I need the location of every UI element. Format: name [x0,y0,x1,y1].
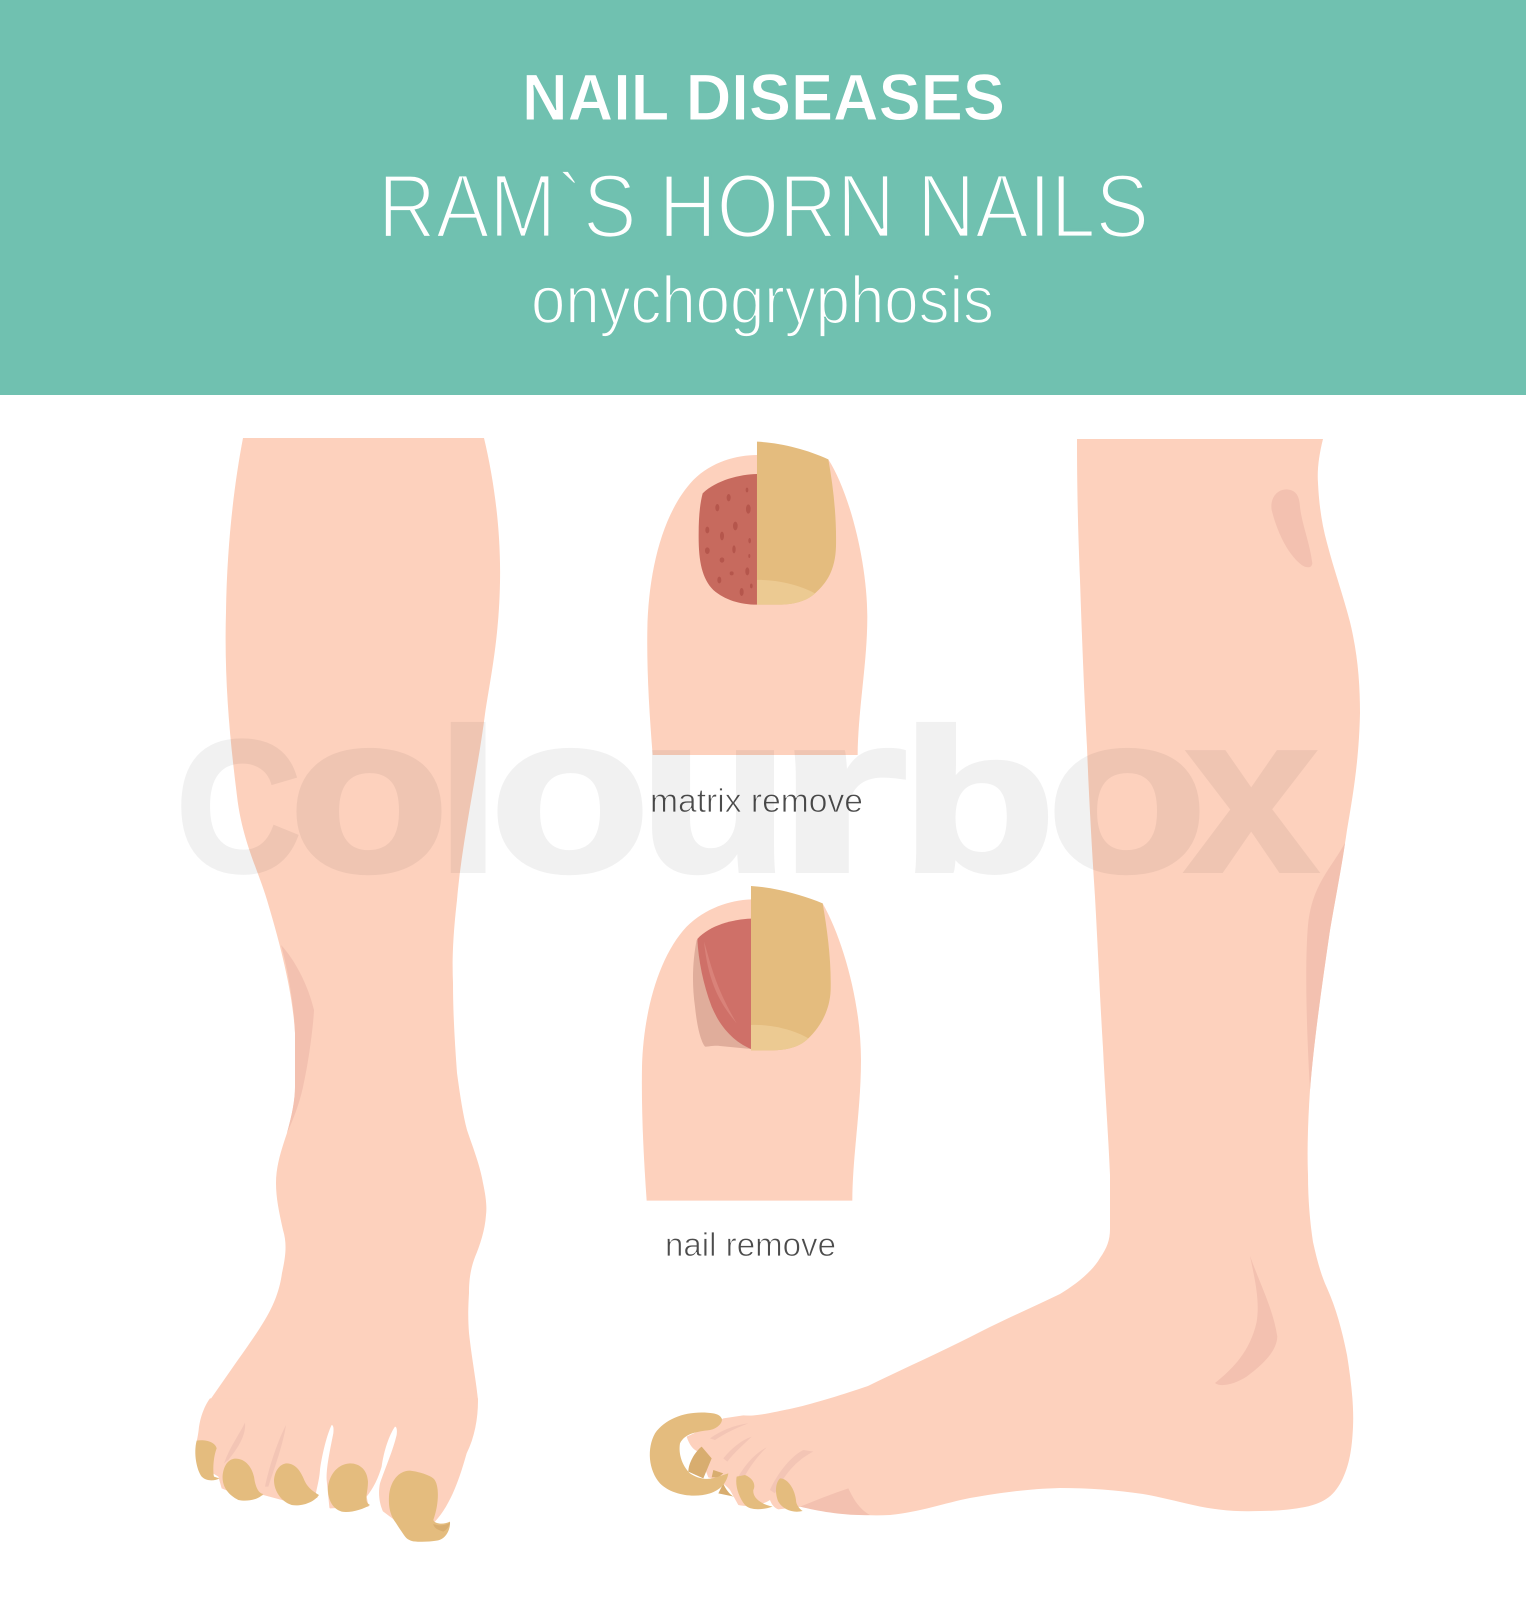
watermark [176,667,1318,919]
calf shadow [1306,843,1345,1090]
nail lunula [751,1025,808,1050]
toe creases [710,1423,813,1493]
nail bed shadow [693,940,751,1049]
curled big toe nail [650,1412,728,1496]
leg shape [210,438,500,1400]
watermark: C [176,702,301,911]
leg shape [740,439,1360,1515]
watermark: r [775,667,908,919]
hidden toe nails [688,1447,734,1497]
third toe nail [736,1475,773,1509]
nail bed highlight [704,942,737,1023]
title: ram's horn nails: RAM`S HORN NAILS [378,157,1149,257]
heading: nail diseases: NAIL DISEASES [522,60,1005,134]
little toe nail [195,1440,219,1480]
label: matrix remove: matrix remove [650,782,863,819]
middle toe nail [274,1463,319,1505]
toe shape [647,455,867,755]
thickened nail [751,886,831,1050]
fourth toe nail [223,1459,263,1501]
toe shape [642,899,861,1201]
watermark: x [1185,667,1318,919]
thickened nail [757,442,836,605]
left leg, front view [195,438,500,1542]
watermark: b [901,688,1056,915]
subtitle: onychogryphosis: onychogryphosis [531,263,994,338]
exposed matrix [699,474,757,605]
right leg, side view [650,439,1360,1515]
matrix dots [705,488,753,596]
toe diagram: matrix remove [647,442,867,755]
watermark: o [490,667,650,919]
header banner [0,0,1526,395]
knee shadow [1271,489,1312,567]
watermark: o [1046,667,1208,919]
watermark: u [639,667,789,919]
toe diagram: nail remove [642,886,861,1201]
nail lunula [757,580,815,605]
label: nail remove: nail remove [665,1226,836,1263]
toes and curled ram's horn nail [650,1412,890,1515]
second toe nail [328,1463,370,1512]
sole shadow [800,1488,870,1515]
toes and overgrown nails [195,1398,478,1542]
watermark: l [438,688,499,915]
watermark: o [288,667,450,919]
big toe nail [389,1471,450,1542]
ankle shadow [1215,1256,1277,1385]
fourth toe nail [776,1478,803,1512]
exposed nail bed [697,919,751,1049]
calf shadow [281,945,314,1133]
